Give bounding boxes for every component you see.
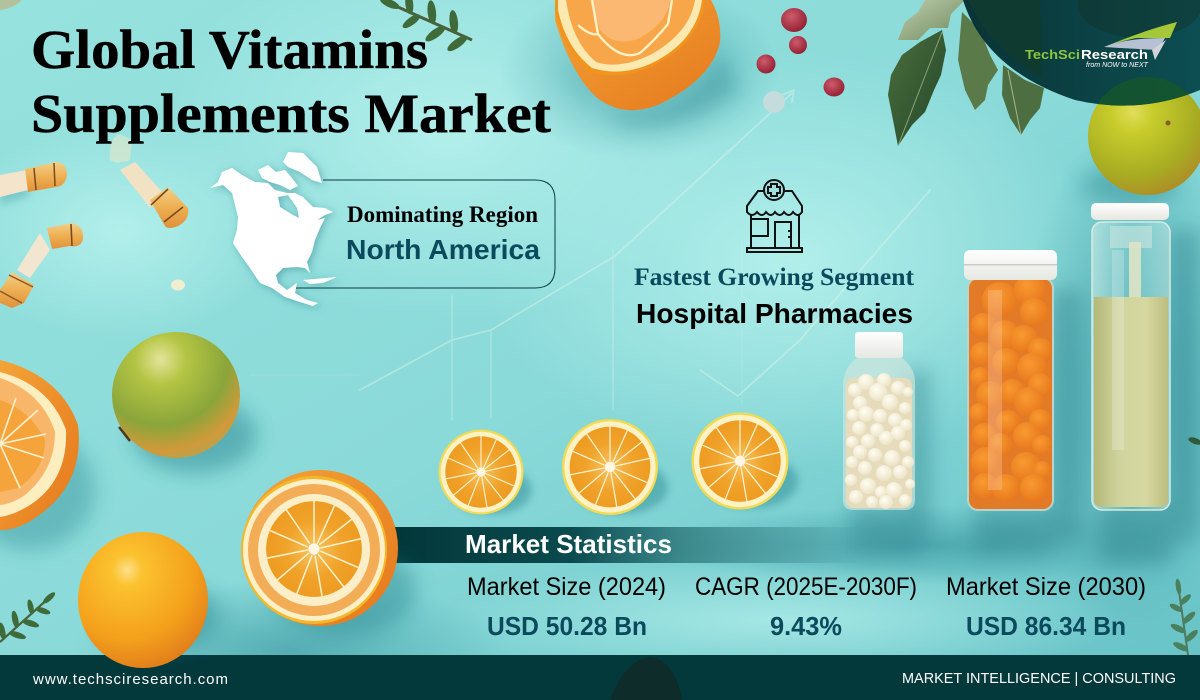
segment label: Fastest Growing Segment [634, 264, 915, 291]
bottom right herbs [1163, 577, 1200, 657]
stat: market size 2024: USD 50.28 Bn [487, 611, 647, 641]
capsule 3 [0, 223, 83, 308]
bottle shadows [850, 230, 1200, 565]
orange slice left [0, 360, 95, 550]
capsule 2 [110, 134, 188, 228]
title: Global Vitamins [31, 19, 428, 80]
top centre orange half [555, 0, 740, 127]
logo band [963, 0, 1200, 106]
icon: pharmacy store [747, 180, 802, 252]
banner: market statistics [392, 527, 862, 563]
stat: CAGR: 9.43% [770, 611, 842, 641]
footer band [0, 655, 1200, 700]
small bottle with white pills [843, 332, 915, 510]
lime seen through band [1098, 77, 1189, 106]
logo [1025, 22, 1177, 69]
region label: Dominating Region [347, 202, 538, 227]
dark leaf under band [968, 0, 1042, 78]
chart trend arrows [250, 90, 930, 420]
region value: North America [346, 234, 540, 265]
orange ball [78, 532, 220, 668]
capsules [0, 134, 188, 308]
capsule 1 [0, 162, 67, 205]
three orange slices [438, 412, 798, 515]
lime top right [1080, 77, 1200, 205]
callout frame [292, 180, 555, 288]
large orange slice [241, 470, 417, 635]
stat: CAGR: CAGR (2025E-2030F) [695, 573, 917, 601]
bottom left herb [0, 581, 65, 654]
stat: market size 2024 [467, 573, 666, 641]
callout: dominating region [210, 152, 555, 306]
logo: Research [1081, 47, 1148, 62]
footer dark leaf [610, 657, 682, 700]
logo: from NOW to NEXT [1086, 62, 1149, 69]
title [31, 19, 552, 144]
stat: market size 2030: Market Size (2030) [946, 573, 1146, 601]
dark fruit under band [1078, 0, 1200, 38]
logo: TechSci [1025, 47, 1080, 62]
top left leaf [0, 0, 22, 10]
map: North America [210, 152, 337, 306]
stat: market size 2024: Market Size (2024) [467, 573, 666, 601]
market statistics heading: Market Statistics [465, 529, 672, 559]
lime lower left [112, 332, 257, 473]
title: Supplements Market [31, 83, 552, 144]
small pill [171, 280, 185, 290]
top herb sprig [371, 0, 481, 60]
footer tagline: MARKET INTELLIGENCE | CONSULTING [902, 670, 1176, 687]
footer website: www.techsciresearch.com [32, 671, 228, 688]
stat: market size 2030 [946, 573, 1146, 641]
middle bottle with orange capsules [964, 250, 1057, 510]
tall bottle [1091, 203, 1170, 510]
top right leaves [888, 0, 1044, 146]
stat: market size 2030: USD 86.34 Bn [966, 611, 1126, 641]
right edge leaf tip [1187, 436, 1200, 446]
stat: CAGR [695, 573, 917, 641]
berries [756, 8, 844, 113]
segment value: Hospital Pharmacies [636, 298, 913, 329]
